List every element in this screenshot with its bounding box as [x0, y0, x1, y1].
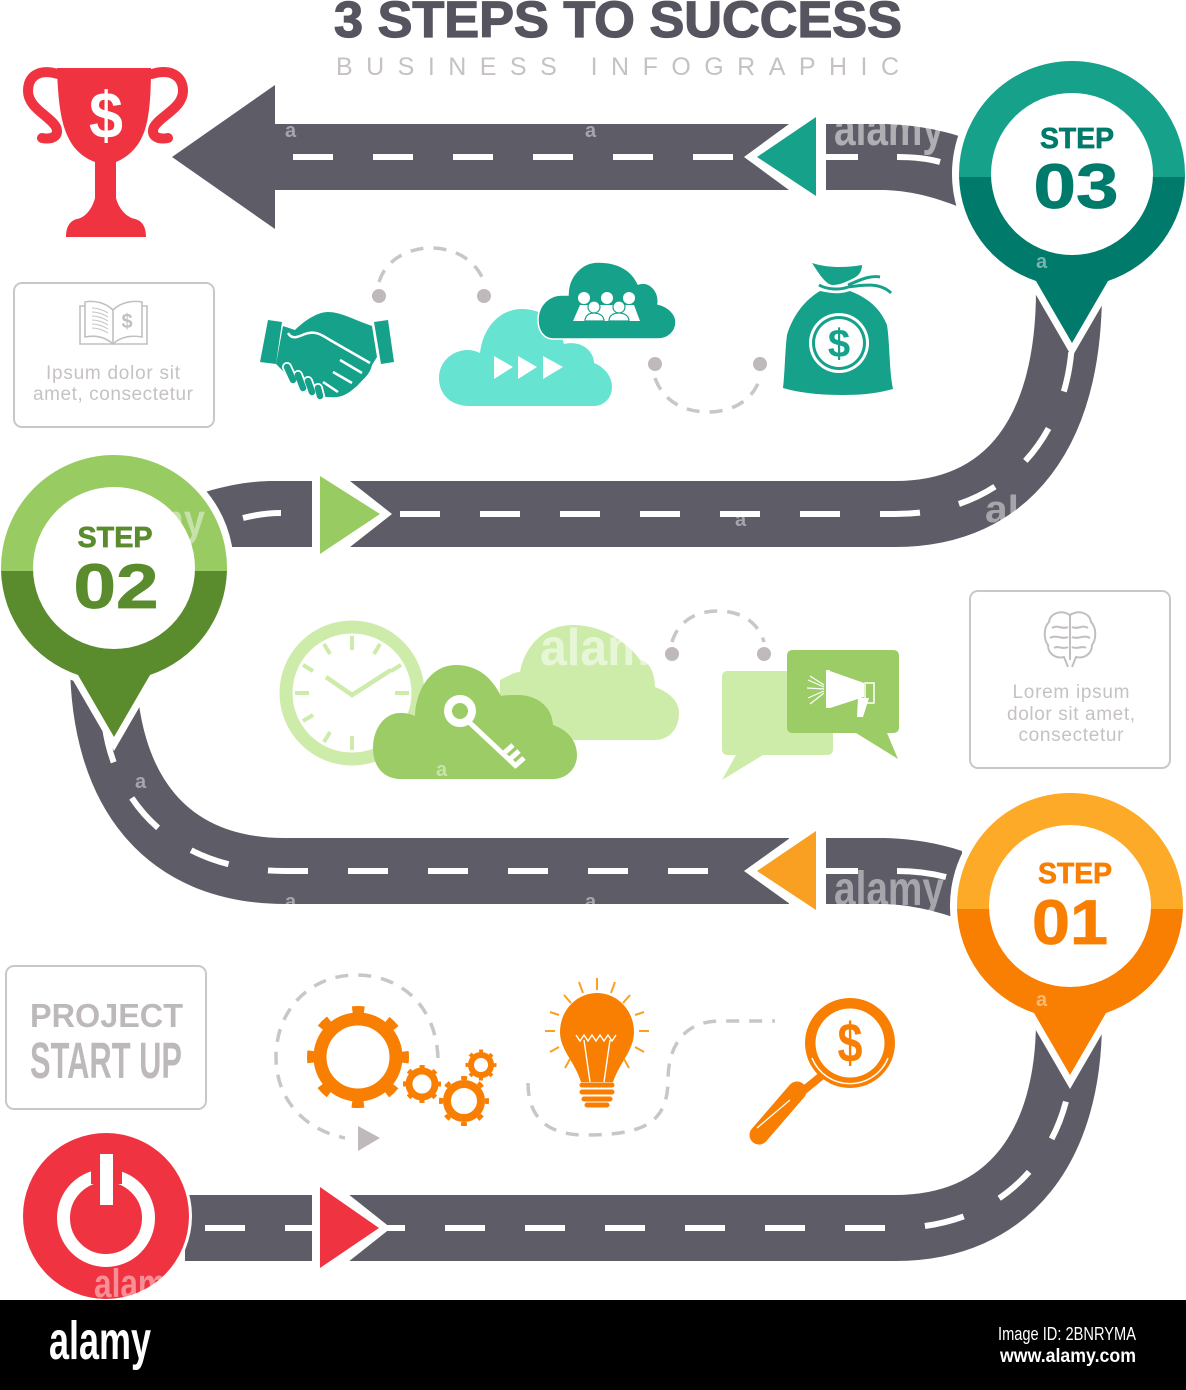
- dashed connector: bulb to magnifier: [528, 1021, 775, 1135]
- watermarks: a: [135, 771, 147, 793]
- icon: gears: [311, 1010, 495, 1124]
- watermarks: a: [1036, 251, 1048, 273]
- watermarks: a: [285, 891, 297, 913]
- pin: step 01: 01: [1032, 888, 1108, 958]
- watermarks: a: [1036, 643, 1048, 665]
- road: start to step 1: [185, 1020, 1072, 1270]
- pin: step 03: 03: [1034, 152, 1118, 222]
- watermarks: [94, 103, 1048, 1306]
- icon: brain: [1045, 612, 1095, 667]
- watermarks: alam: [94, 1262, 166, 1306]
- arrow marker: orange: [757, 831, 816, 910]
- subtitle: BUSINESS INFOGRAPHIC: [336, 53, 899, 81]
- megaphone: [807, 670, 874, 717]
- watermarks: alamy: [834, 863, 944, 916]
- arrow marker: green: [320, 476, 380, 554]
- icon: cloud with key: [373, 665, 577, 779]
- icon: speech bubbles with megaphone: [722, 650, 899, 780]
- icon: magnifier: $: [838, 1011, 862, 1074]
- arrow marker: teal: [757, 117, 816, 196]
- image id: Image ID: 2BNRYMA: [998, 1324, 1136, 1344]
- watermarks: my: [150, 496, 205, 545]
- dashed connector: cloud to speech bubbles: [665, 611, 771, 661]
- footer bar: [0, 1300, 1186, 1390]
- info box: book: [14, 283, 214, 427]
- icon: clock: [286, 627, 418, 759]
- icon: cloud with arrows: [439, 309, 612, 406]
- box text: dolor sit amet,: [1007, 704, 1135, 725]
- watermarks: a: [436, 759, 448, 781]
- road: step 3 to step 2: [205, 290, 1072, 558]
- footer logo: alamy: [49, 1311, 151, 1371]
- icon: cloud with team: [538, 262, 676, 339]
- info box: project start up: [6, 966, 206, 1109]
- arrow marker: red: [320, 1187, 379, 1268]
- watermarks: a: [585, 120, 597, 142]
- box text: amet, consectetur: [33, 384, 194, 405]
- dashed connector: handshake to cloud: [372, 248, 491, 303]
- dashed loop with arrow: [276, 975, 438, 1151]
- label: project: PROJECT: [30, 997, 183, 1034]
- watermarks: a: [285, 120, 297, 142]
- pin: step 03: [959, 61, 1185, 343]
- dashed connector: cloud to bag: [648, 357, 767, 412]
- box text: consectetur: [1018, 725, 1124, 746]
- icon: handshake: [260, 312, 394, 397]
- info box: brain: [970, 591, 1170, 768]
- icon: pale cloud: [500, 625, 679, 740]
- box text: Ipsum dolor sit: [46, 363, 181, 384]
- watermarks: a: [1036, 989, 1048, 1011]
- label: start up: START UP: [30, 1032, 182, 1089]
- pin: step 01: [957, 793, 1183, 1075]
- pin: step 01: STEP: [1038, 858, 1112, 890]
- road: step 2 to step 1: [103, 660, 962, 920]
- watermarks: alamy: [834, 103, 944, 156]
- icon: open book: [80, 301, 147, 344]
- icon: power button: [20, 1130, 192, 1302]
- pin: step 02: [1, 455, 227, 737]
- icon: money bag: $: [828, 322, 850, 366]
- watermarks: a: [585, 891, 597, 913]
- icon: magnifier: [757, 998, 895, 1135]
- icon: trophy: $: [89, 78, 123, 152]
- box text: Lorem ipsum: [1012, 682, 1130, 703]
- watermarks: a: [735, 509, 747, 531]
- watermarks: alam: [540, 619, 650, 677]
- road: final stretch with arrowhead: [172, 85, 962, 229]
- watermarks: al: [985, 489, 1019, 531]
- pin: step 02: STEP: [78, 522, 152, 554]
- icon: light bulb: [545, 978, 649, 1105]
- website: www.alamy.com: [999, 1346, 1136, 1367]
- icon: money bag: [783, 263, 893, 395]
- pin: step 03: STEP: [1040, 123, 1114, 155]
- pin: step 02: 02: [74, 552, 158, 622]
- icon: open book: $: [121, 311, 133, 333]
- icon: trophy: [28, 68, 183, 237]
